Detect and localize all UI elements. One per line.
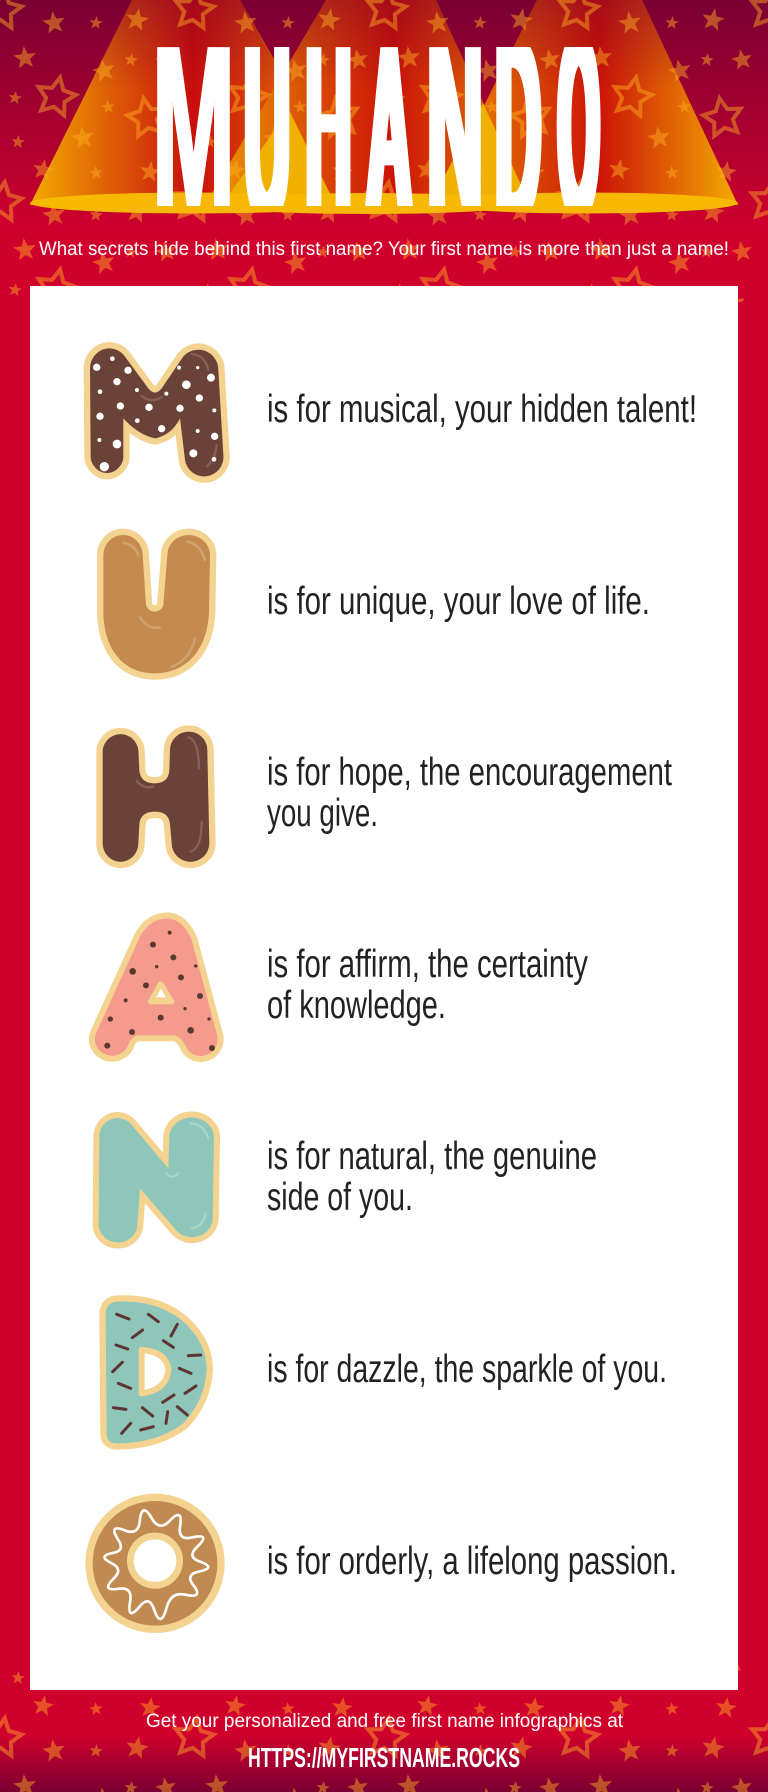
- spotlight: right cone: [434, 0, 738, 205]
- icon: cookie letter N: [99, 1117, 214, 1243]
- footer text: Get your personalized and free first name infographics at: [146, 1711, 624, 1732]
- star pattern: header: [0, 0, 768, 302]
- spotlight: middle cone: [205, 0, 530, 205]
- title: U: [244, 0, 290, 271]
- title: A: [367, 0, 411, 254]
- spotlight overlap: right: [432, 103, 530, 204]
- white content panel: [30, 286, 738, 1690]
- spotlight bases: [30, 192, 738, 214]
- icon: cookie letter O: [89, 1497, 221, 1629]
- icon: cookie letter U: [103, 535, 210, 673]
- spotlight: top shading: [88, 0, 684, 90]
- footer url: HTTPS://MYFIRSTNAME.ROCKS: [248, 1742, 520, 1773]
- text: A lines: of knowledge.: [267, 984, 446, 1027]
- text: U line: is for unique, your love of life.: [267, 580, 650, 623]
- text: A lines: is for affirm, the certainty: [267, 943, 588, 986]
- icon: cookie letter M: [90, 348, 223, 476]
- subtitle: What secrets hide behind this first name? Your first name is more than just a name!: [39, 239, 729, 260]
- title: M: [152, 0, 235, 254]
- text: H lines: you give.: [267, 792, 378, 835]
- text: N lines: is for natural, the genuine: [267, 1135, 597, 1178]
- title: H: [306, 0, 351, 254]
- icon: cookie letter H: [103, 732, 209, 862]
- star pattern: footer: [0, 1665, 768, 1792]
- title: N: [427, 0, 483, 254]
- spotlight: left cone: [30, 0, 358, 205]
- text: N lines: side of you.: [267, 1176, 413, 1219]
- spotlight overlap: left: [228, 110, 335, 204]
- title: [157, 47, 601, 206]
- icon: cookie letter D: [106, 1302, 207, 1443]
- spotlights: [30, 0, 738, 214]
- icon: cookie letter A: [95, 918, 218, 1056]
